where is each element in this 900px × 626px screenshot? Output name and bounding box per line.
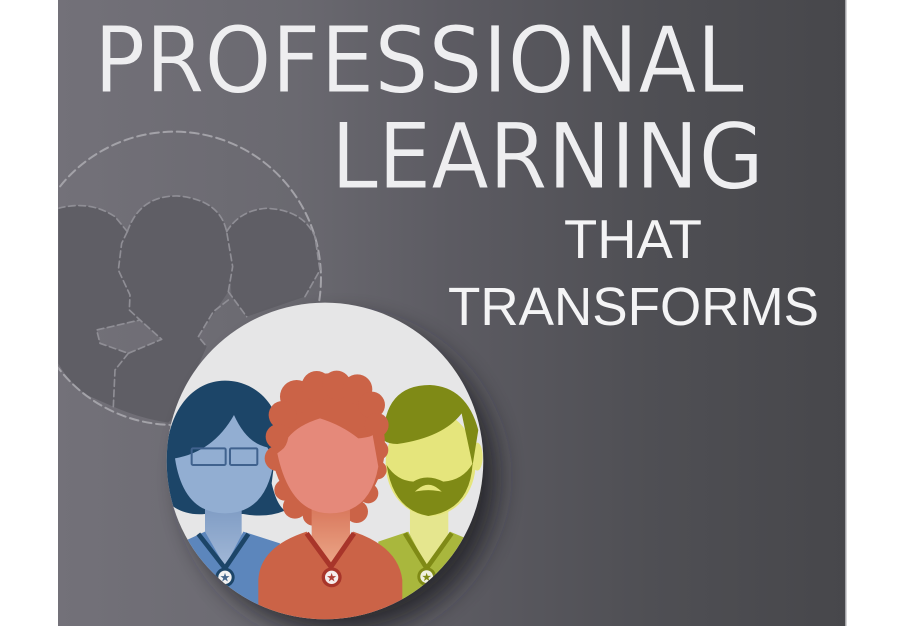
- shadow under portrait disc: [185, 321, 497, 626]
- title: professional learning: PROFESSIONAL: [94, 7, 744, 114]
- portrait disc: three people: [166, 303, 483, 620]
- icon: star medal: ★: [422, 572, 432, 584]
- title: professional learning: LEARNING: [331, 105, 764, 210]
- subtitle: that transforms: [448, 208, 819, 337]
- title: professional learning: [94, 7, 764, 210]
- person: red curly-haired woman: [258, 371, 402, 620]
- subtitle: that transforms: THAT: [564, 208, 702, 270]
- icon: dashed ghost group of people: [28, 132, 321, 425]
- icon: star medal: ★: [220, 571, 230, 585]
- subtitle: that transforms: TRANSFORMS: [448, 277, 819, 337]
- icon: star medal: ★: [326, 571, 337, 585]
- person: olive bearded man: [378, 385, 483, 617]
- person: blue woman with glasses: [166, 381, 285, 617]
